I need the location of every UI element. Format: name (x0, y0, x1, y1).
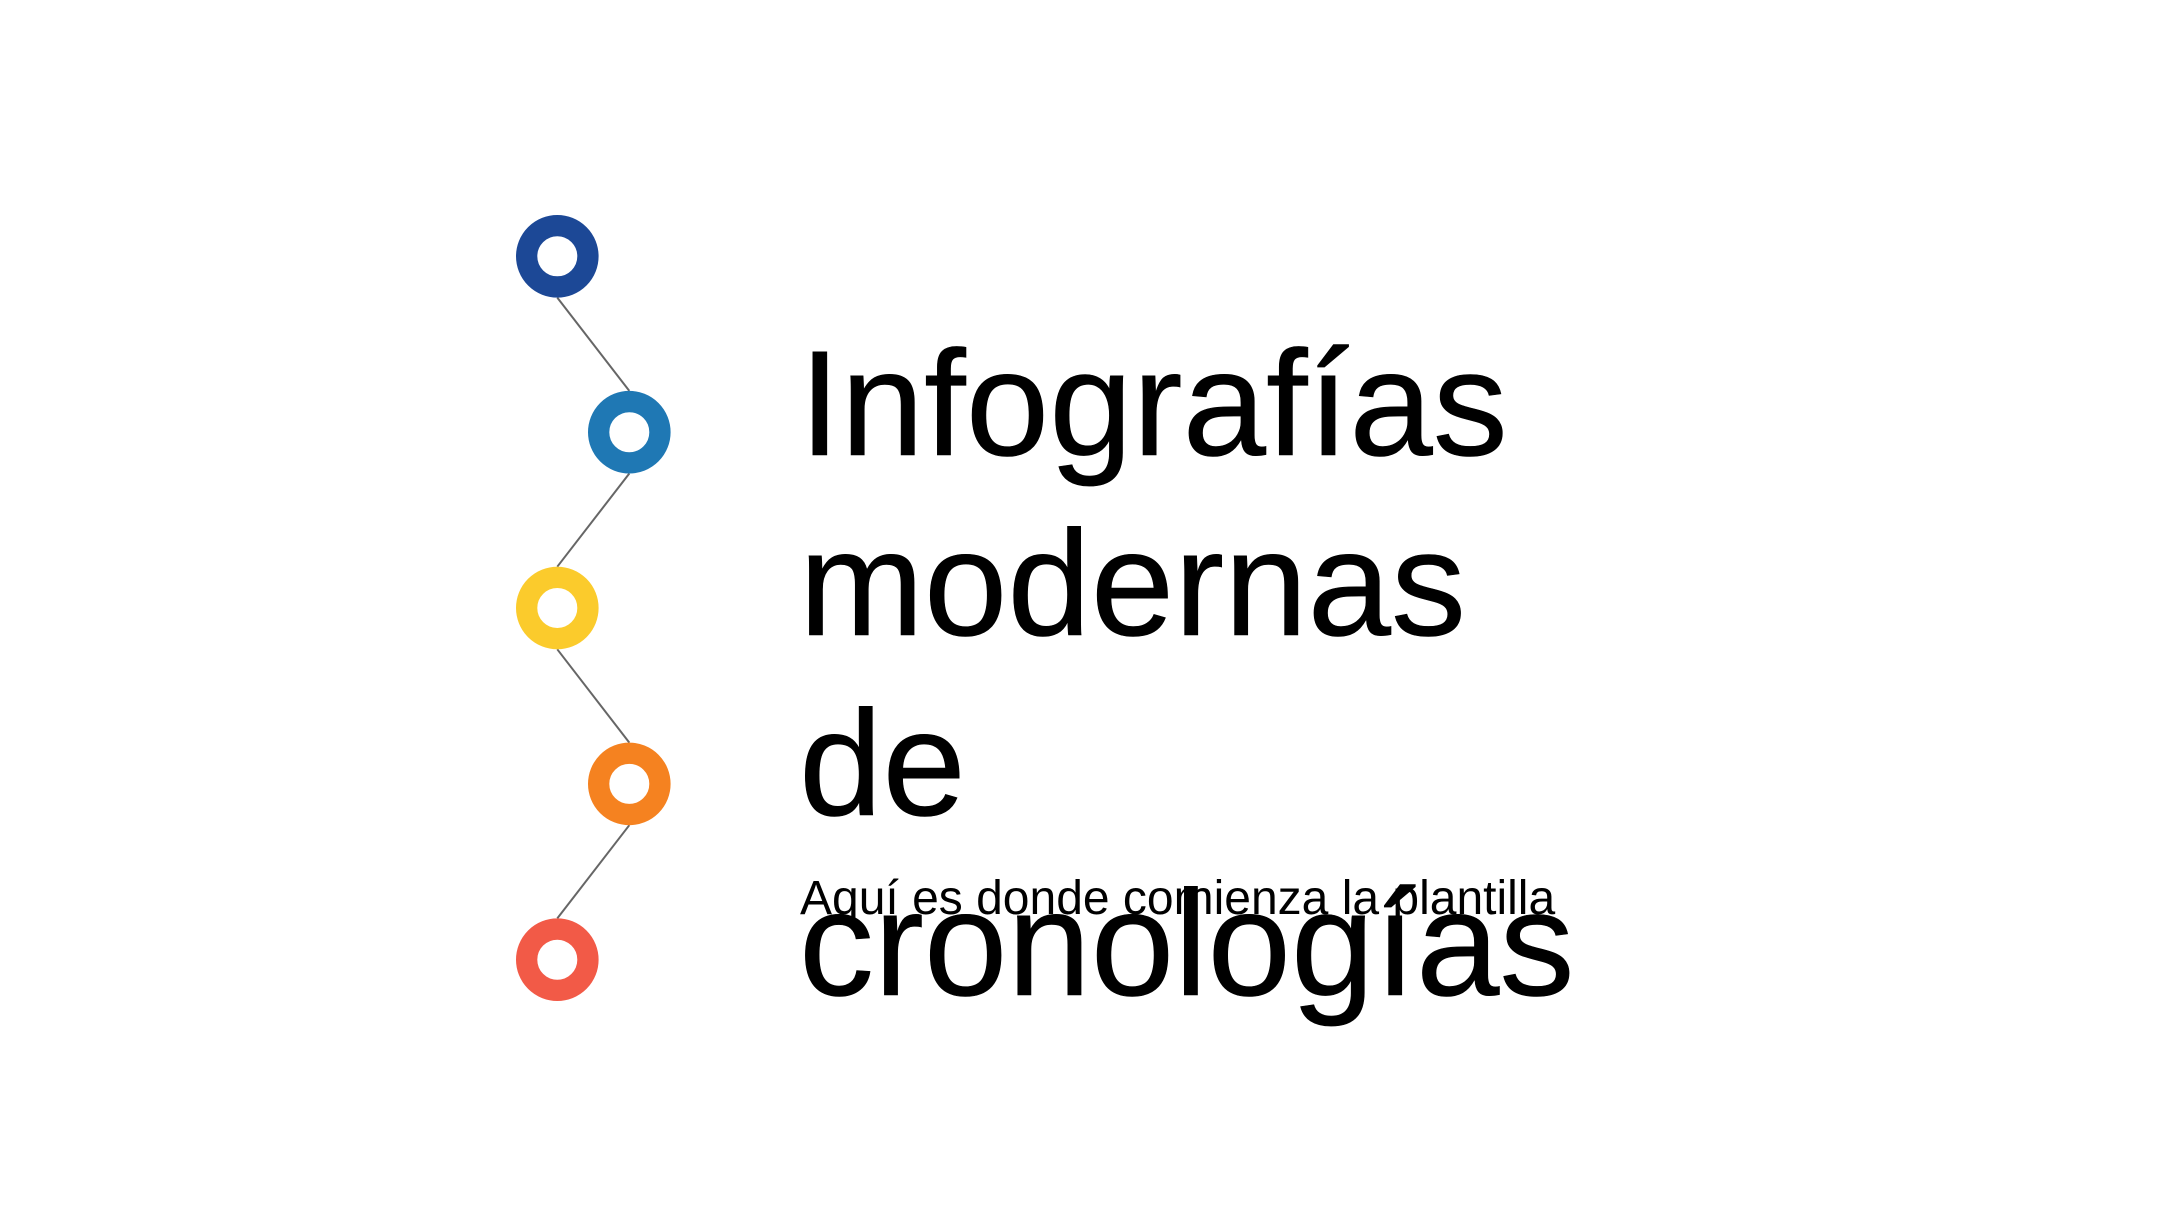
node 5: red ring (527, 929, 588, 990)
connector 2 (557, 474, 629, 567)
node 3: yellow ring (527, 577, 588, 639)
title: cronologías (799, 859, 1574, 1027)
node 1: dark blue ring (527, 226, 588, 287)
title (799, 319, 1574, 1027)
subtitle: Aquí es donde comienza la plantilla (800, 872, 1555, 925)
title: Infografías (799, 319, 1508, 487)
connector 1 (557, 298, 629, 391)
title: modernas (799, 499, 1466, 667)
node 4: orange ring (599, 753, 660, 815)
connector 3 (557, 649, 629, 743)
title: de (799, 679, 966, 847)
connector 4 (557, 825, 629, 918)
node 2: blue ring (599, 402, 660, 463)
